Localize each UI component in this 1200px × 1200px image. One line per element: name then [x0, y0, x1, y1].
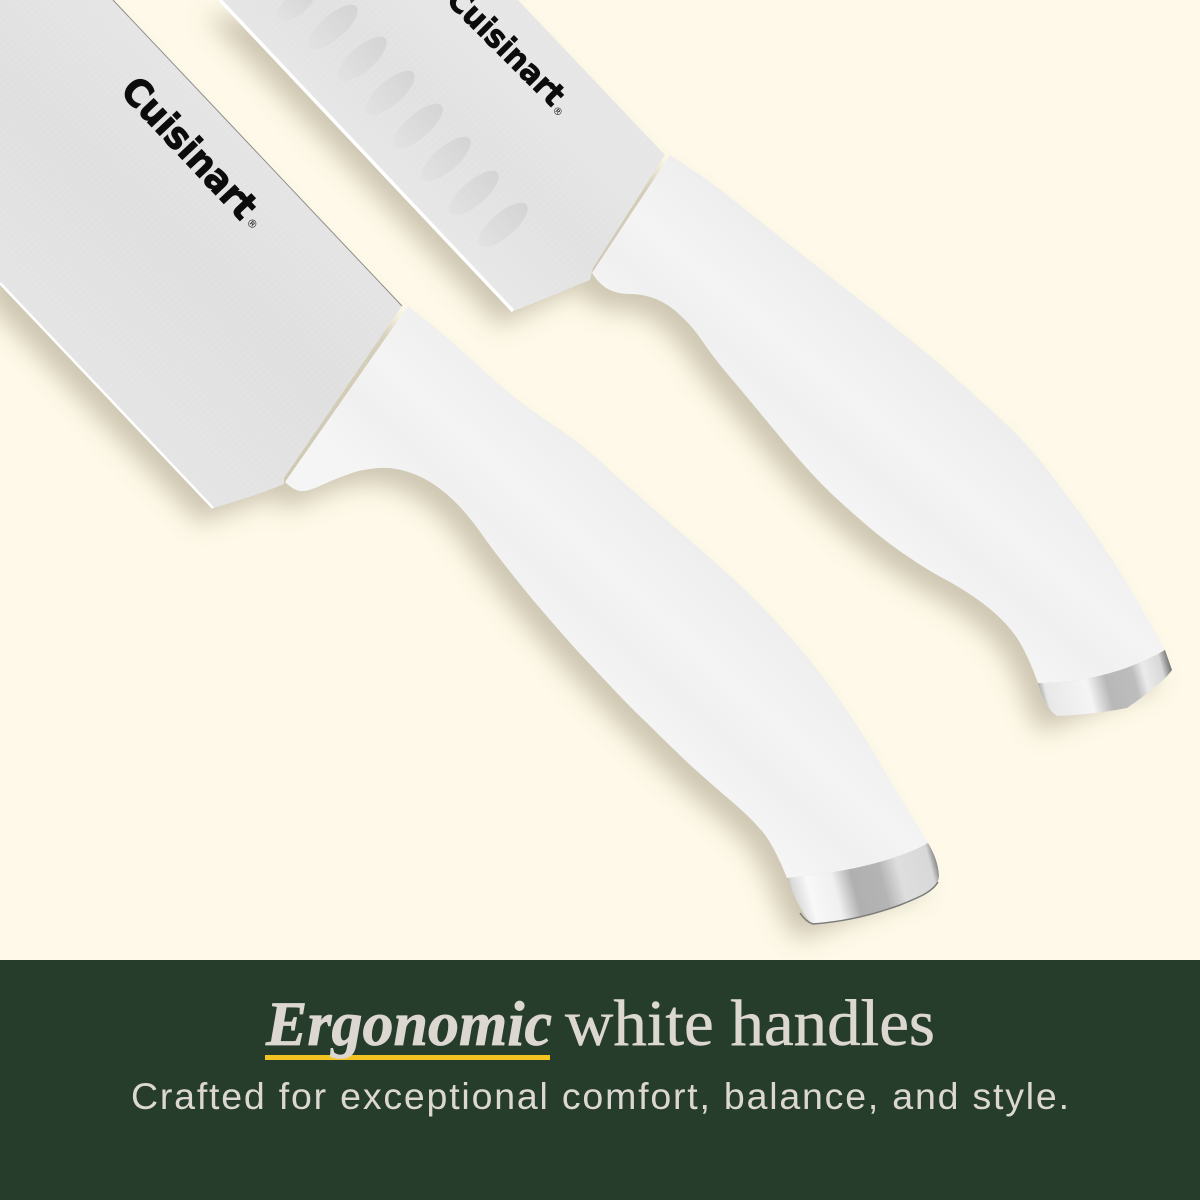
nakiri handle	[285, 306, 928, 878]
subheading: Crafted for exceptional comfort, balance, and style.	[131, 1075, 1069, 1117]
heading: white handles	[565, 987, 935, 1060]
knife: santoku with hollow-edge dimples (right)	[220, 0, 1172, 716]
heading underline	[265, 1055, 550, 1060]
santoku logo trademark: ®	[550, 105, 564, 119]
heading	[265, 987, 935, 1060]
santoku blade	[220, 0, 665, 311]
blade dimples	[272, 0, 534, 254]
santoku handle	[592, 155, 1165, 683]
nakiri blade	[0, 0, 402, 508]
drop shadows beneath knives	[0, 16, 1158, 940]
cream background	[0, 0, 1200, 960]
footer band	[0, 960, 1200, 1200]
heading: Ergonomic	[265, 988, 552, 1059]
santoku metal end cap	[1038, 650, 1172, 716]
nakiri logo trademark: ®	[243, 216, 261, 232]
nakiri metal end cap	[787, 843, 939, 924]
knife: nakiri cleaver (left)	[0, 0, 939, 924]
nakiri logo: Cuisinart	[112, 68, 266, 228]
